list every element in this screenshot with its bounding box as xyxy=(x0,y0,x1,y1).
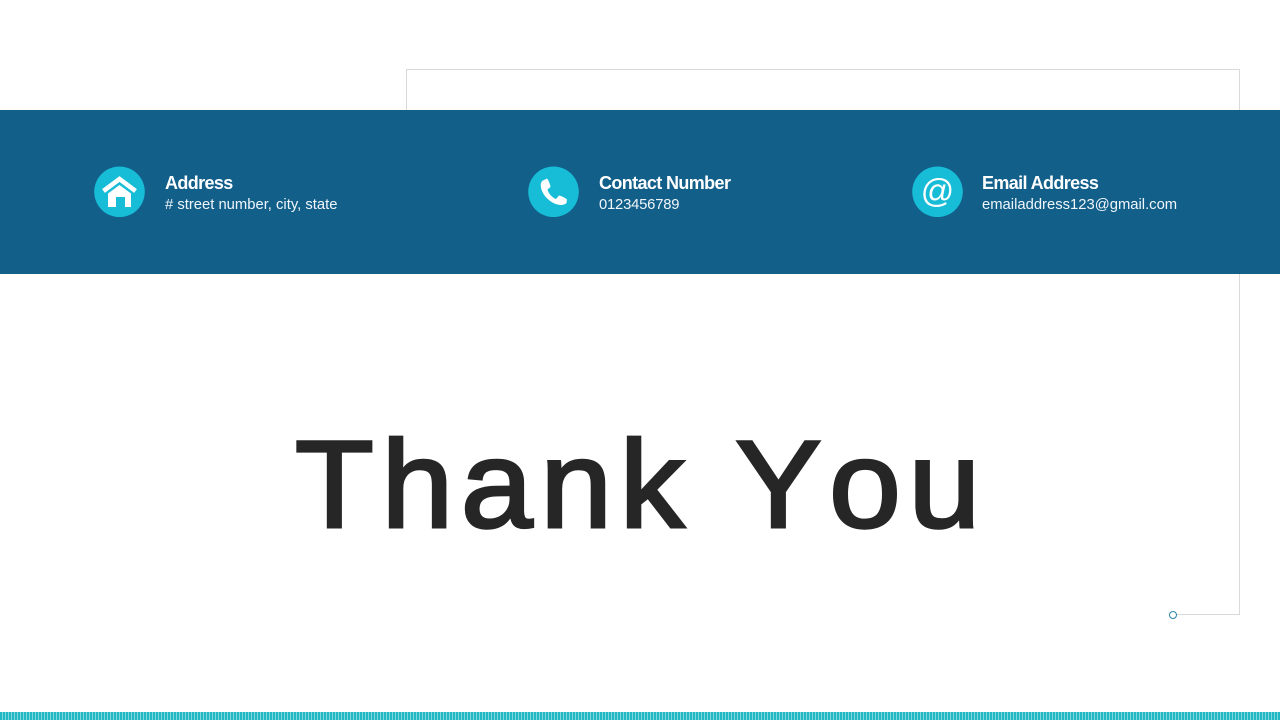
contact: address xyxy=(94,166,337,217)
email value: emailaddress123@gmail.com xyxy=(982,196,1177,212)
icon: phone xyxy=(528,166,579,217)
address value: # street number, city, state xyxy=(165,196,337,212)
icon: at sign: @ xyxy=(921,172,954,209)
title: Thank You: Thank You xyxy=(295,416,988,554)
email heading: Email Address xyxy=(982,173,1098,193)
decorative outline frame xyxy=(406,69,1240,615)
contact banner xyxy=(0,110,1280,274)
striped footer bar xyxy=(0,712,1280,720)
contact: email xyxy=(912,166,1177,217)
icon: house xyxy=(94,166,145,217)
address heading: Address xyxy=(165,173,233,193)
icon: at sign xyxy=(912,166,963,217)
phone value: 0123456789 xyxy=(599,196,679,212)
phone heading: Contact Number xyxy=(599,173,730,193)
contact: phone xyxy=(528,166,731,217)
frame end circle xyxy=(1169,611,1177,619)
